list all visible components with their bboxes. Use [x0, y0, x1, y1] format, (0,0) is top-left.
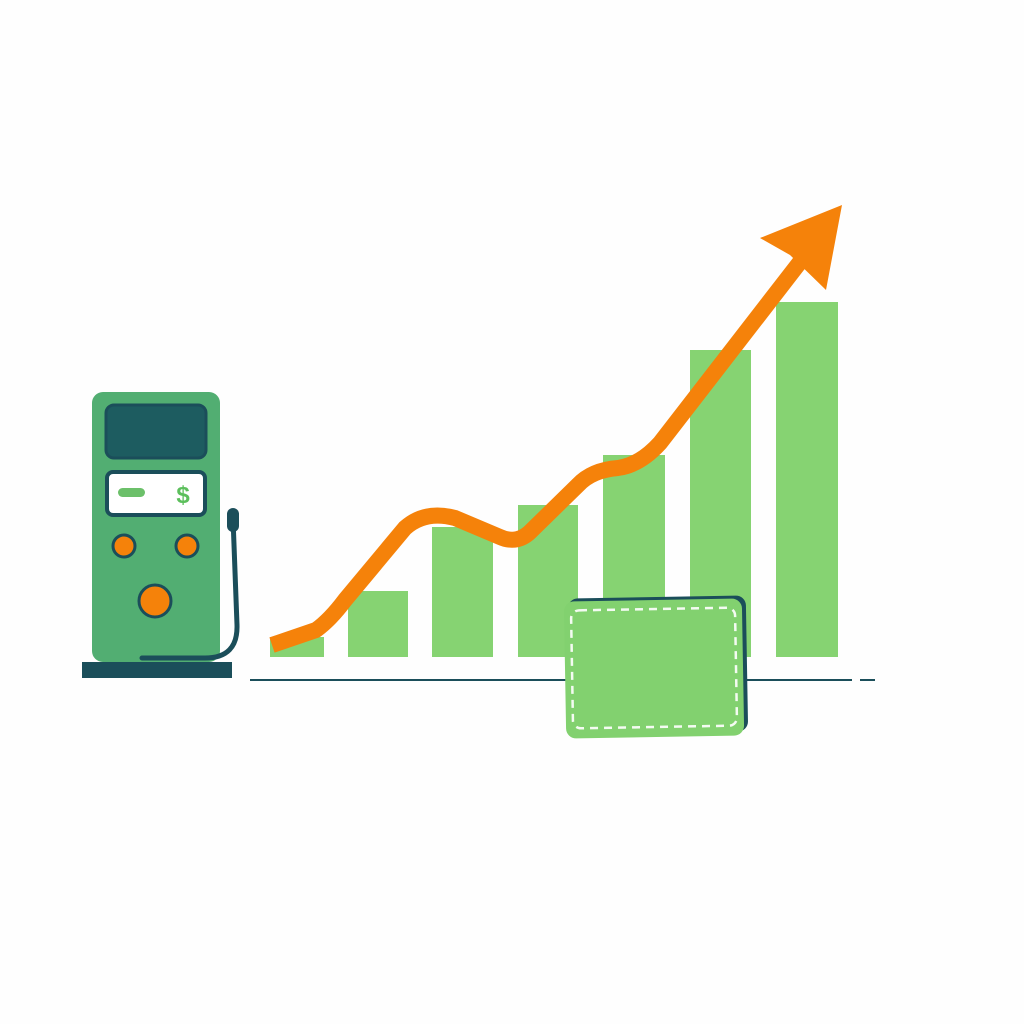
- price display: [107, 472, 205, 515]
- pump body: [92, 392, 220, 662]
- axis baseline: [250, 679, 875, 681]
- icon: wallet: [564, 595, 748, 739]
- icon: fuel pump: $: [176, 482, 190, 509]
- arrow: rising price trend: [272, 205, 842, 645]
- buttons: [113, 535, 135, 557]
- pump screen: [106, 405, 206, 458]
- pump base: [82, 662, 232, 678]
- bar chart: [270, 302, 838, 657]
- hose: [142, 518, 237, 658]
- icon: fuel pump: [82, 392, 239, 678]
